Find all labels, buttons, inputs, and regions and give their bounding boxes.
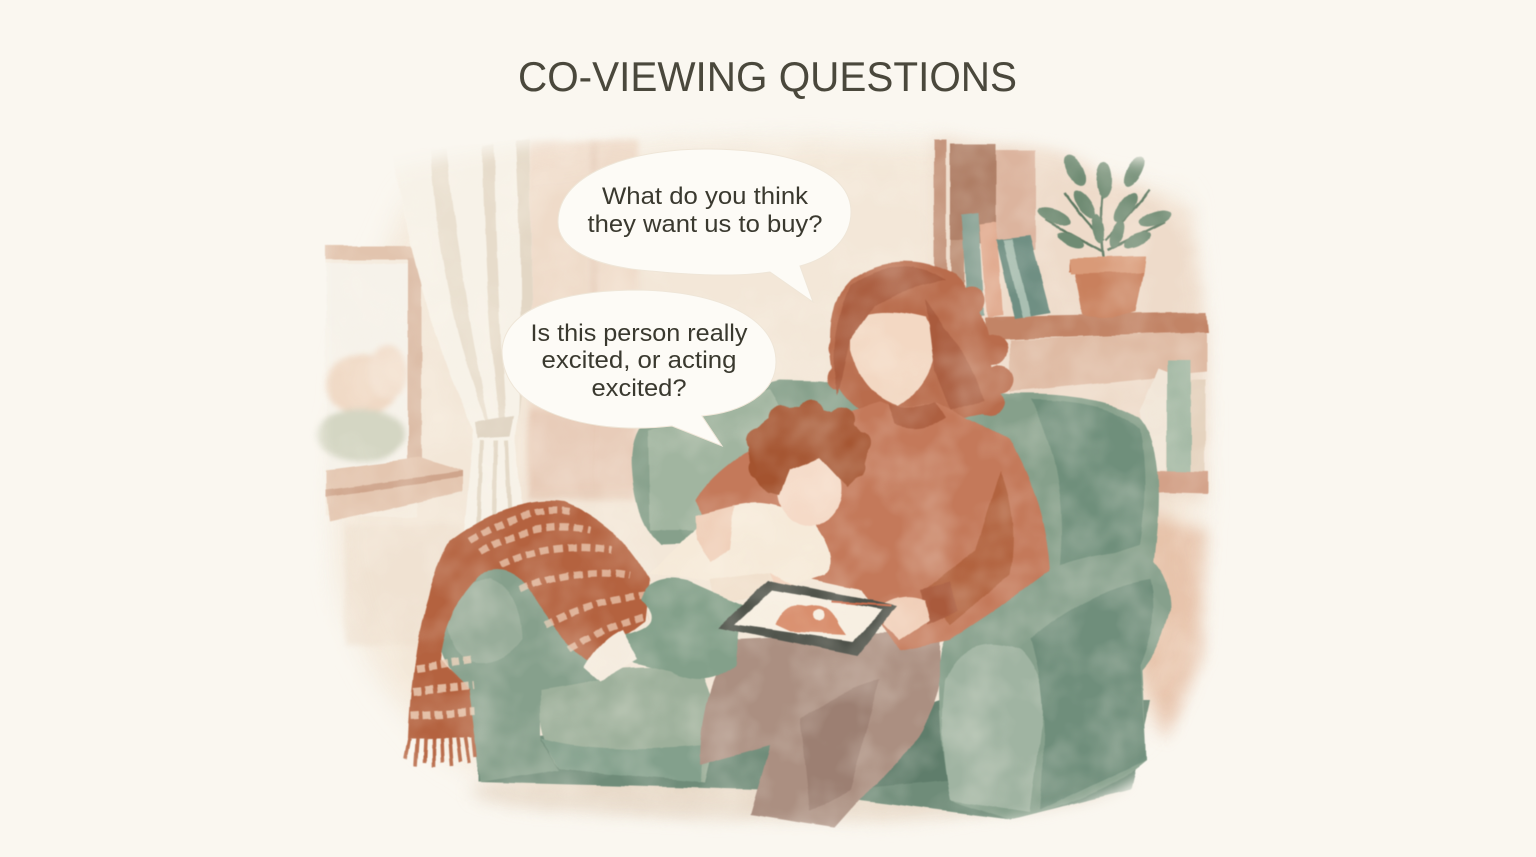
armchair xyxy=(406,380,1205,820)
seat cushion xyxy=(539,668,720,782)
speech bubble: is this person excited xyxy=(502,290,776,446)
chair base xyxy=(478,700,1150,820)
tablet xyxy=(718,580,898,656)
child body xyxy=(680,502,832,579)
child legs xyxy=(620,579,742,680)
mother legs xyxy=(700,630,940,828)
bubble text 2: excited, or acting xyxy=(542,347,736,374)
mother xyxy=(695,261,1050,828)
wall panelling xyxy=(345,140,638,645)
child xyxy=(584,399,871,682)
mother hair front xyxy=(834,266,985,410)
books upper shelf xyxy=(961,212,1050,318)
mother face xyxy=(850,312,936,406)
window xyxy=(316,246,462,522)
bubble text 1: they want us to buy? xyxy=(588,211,822,238)
left arm xyxy=(436,562,600,782)
blanket on armrest xyxy=(406,501,650,766)
mother hair back xyxy=(827,261,1014,420)
wall wash xyxy=(337,142,1198,815)
chair back xyxy=(631,379,1160,570)
sweater xyxy=(695,402,1050,650)
clouds outside window xyxy=(316,346,408,461)
illustration: room scene xyxy=(316,140,1208,828)
bubble text 2: Is this person really xyxy=(530,320,748,347)
lower shelf books xyxy=(1140,360,1208,494)
child hair xyxy=(747,399,871,495)
mother hand xyxy=(885,597,930,640)
mother hand on child's shoulder xyxy=(696,505,735,562)
potted plant xyxy=(1036,152,1174,318)
curtain xyxy=(408,140,532,530)
bubble text 1: What do you think xyxy=(602,183,809,210)
child face xyxy=(778,454,842,526)
child finger xyxy=(770,572,806,600)
speech bubble: what do you think xyxy=(558,149,851,302)
bubble text 2: excited? xyxy=(592,375,686,402)
right arm xyxy=(939,552,1170,820)
child socks xyxy=(584,630,638,682)
bookshelf xyxy=(934,140,1208,500)
armchair shadow xyxy=(472,782,1114,825)
title: CO-VIEWING QUESTIONS xyxy=(518,53,1017,100)
blanket fringe xyxy=(406,738,476,766)
child arm xyxy=(710,574,772,600)
right wall terracotta wash xyxy=(1130,510,1205,740)
